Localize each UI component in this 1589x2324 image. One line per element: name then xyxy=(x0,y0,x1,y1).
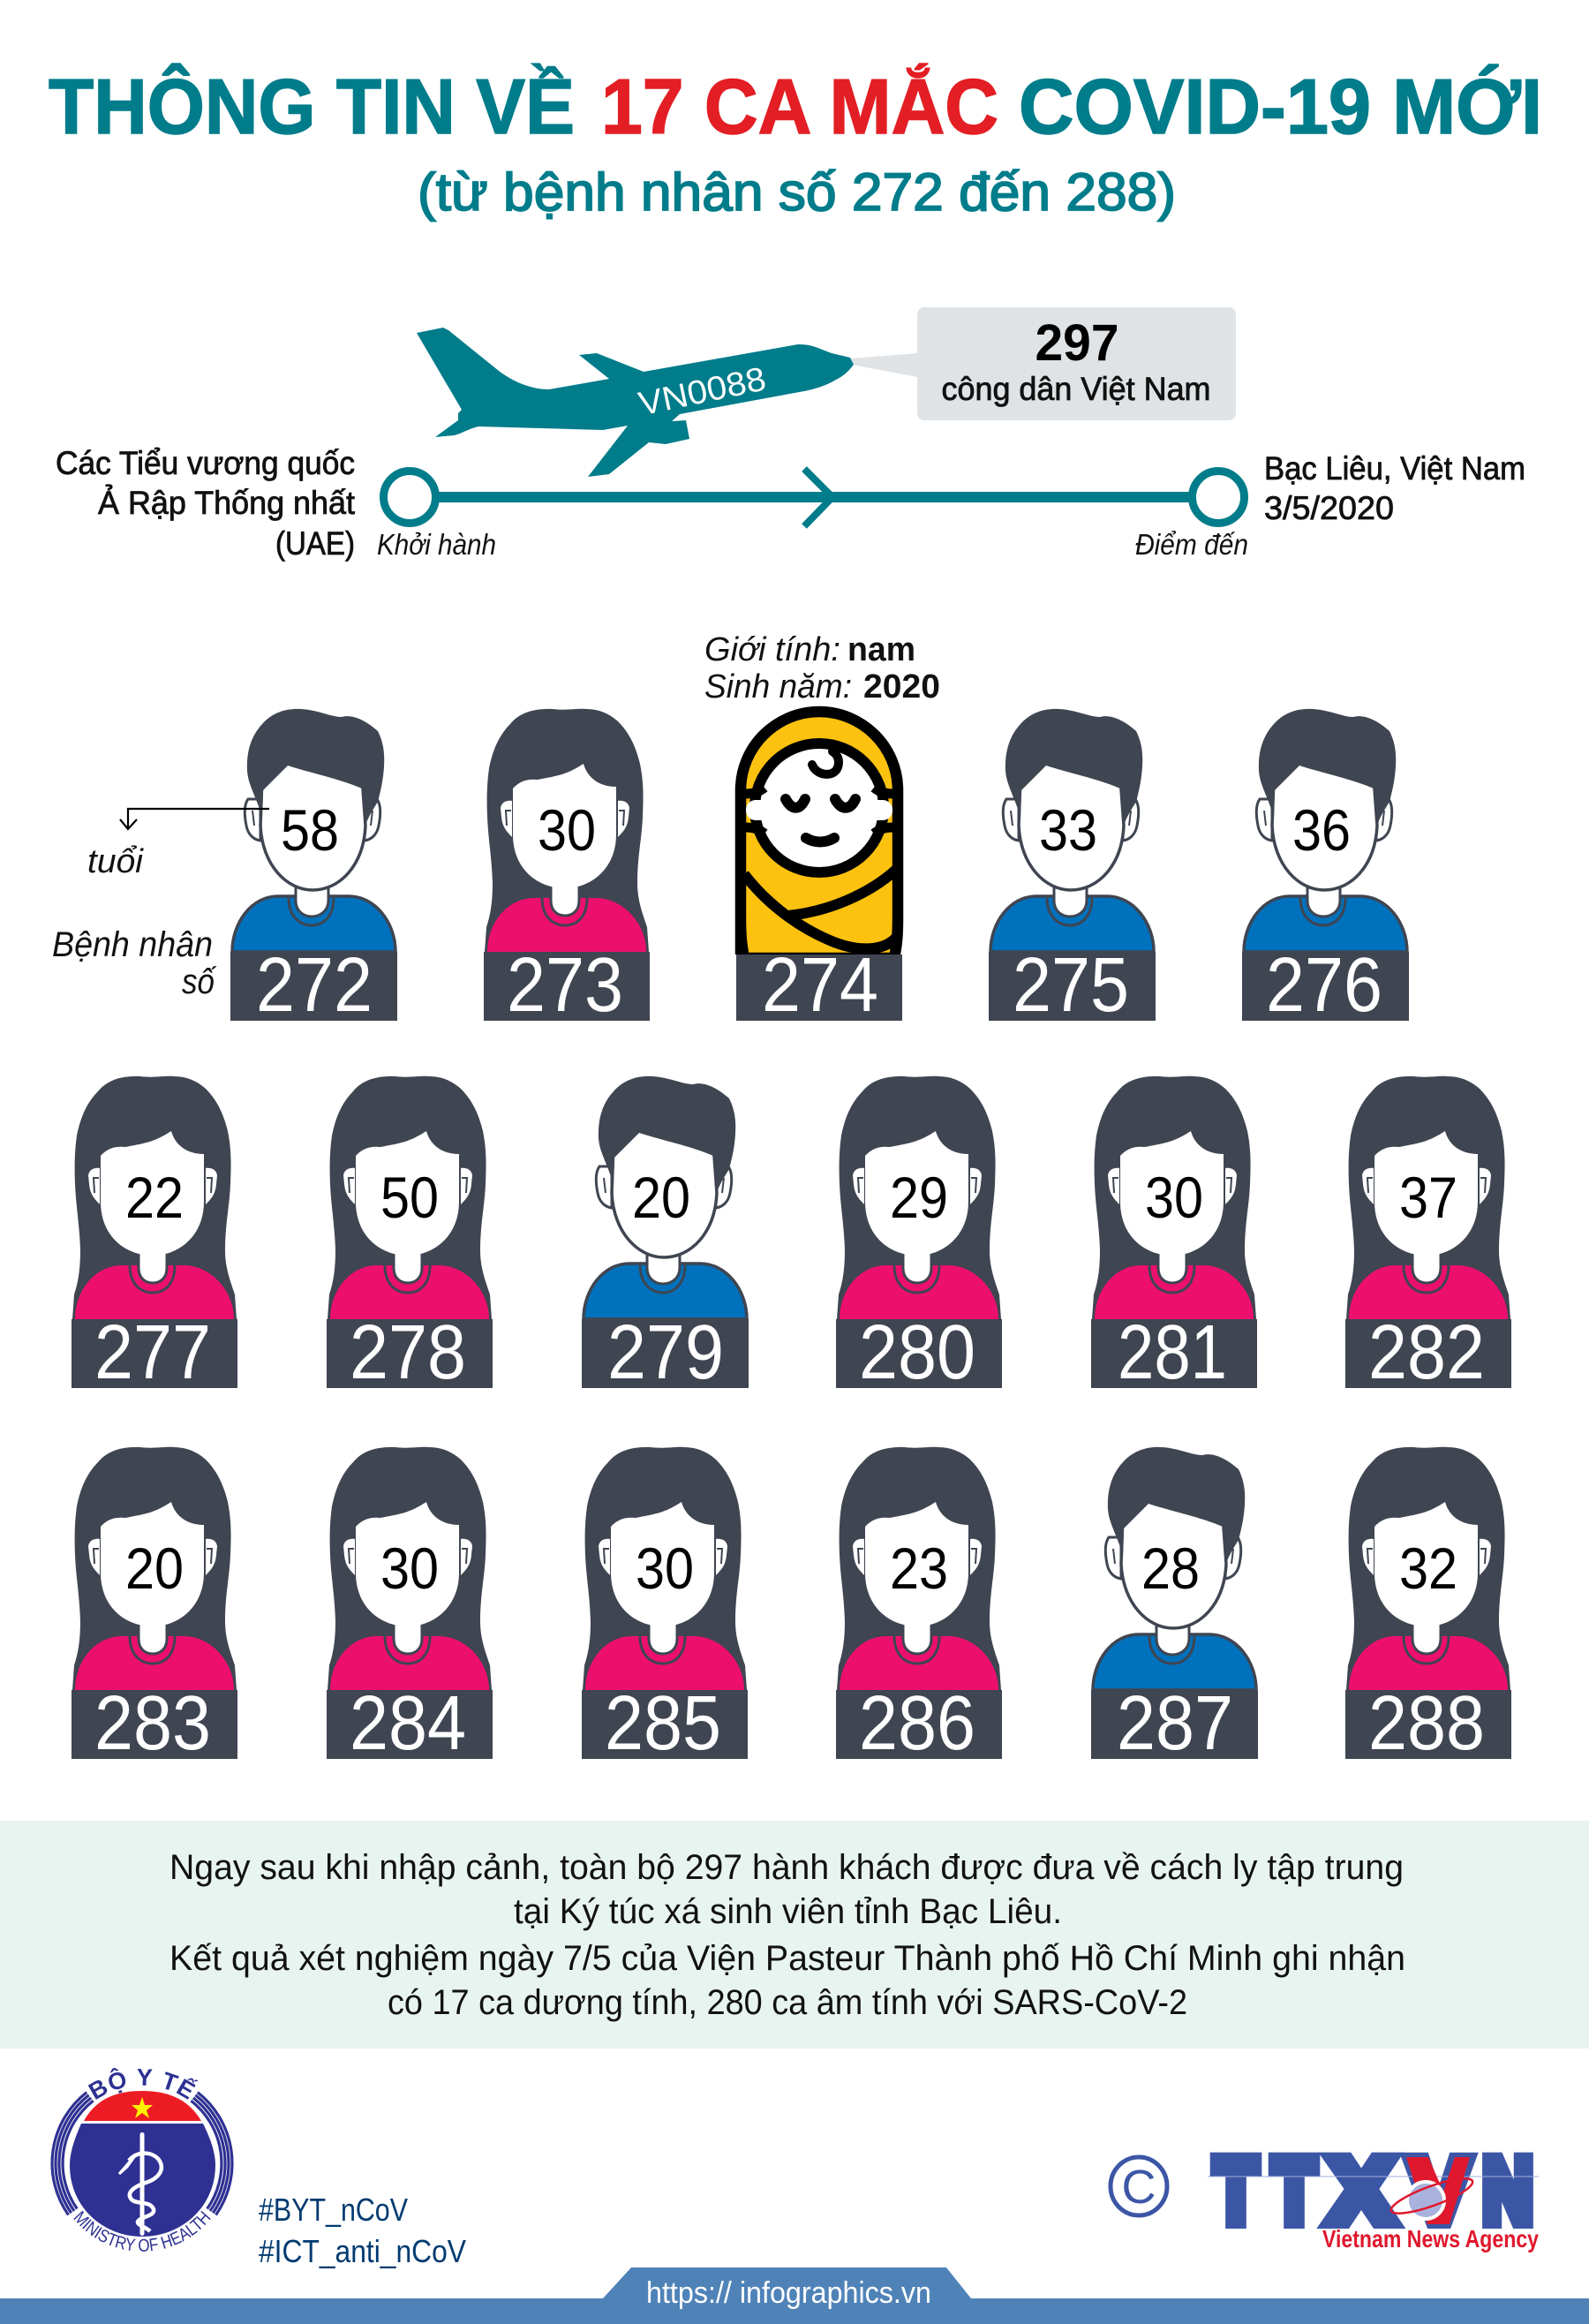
icon: airplane VN0088 xyxy=(417,328,854,477)
origin label: Các Tiểu vương quốc xyxy=(56,445,355,481)
patient 273: 30 xyxy=(538,797,596,863)
patient 287: 28 xyxy=(1141,1536,1200,1601)
arrival caption: Điểm đến xyxy=(1135,528,1248,561)
patient 287: 287 xyxy=(1117,1680,1233,1766)
patient 277: 277 xyxy=(94,1309,211,1395)
hashtags: #BYT_nCoV xyxy=(259,2192,408,2228)
footer url: https:// infographics.vn xyxy=(646,2276,931,2310)
subtitle: (từ bệnh nhân số 272 đến 288) xyxy=(418,162,1176,222)
origin label: Ả Rập Thống nhất xyxy=(98,485,356,521)
callout: 297 citizens xyxy=(829,307,1236,420)
patient 275: 275 xyxy=(1013,942,1129,1028)
patient 283 xyxy=(72,1447,237,1766)
patient 277: 22 xyxy=(125,1165,184,1230)
patient 274 baby note: nam xyxy=(847,631,915,668)
patient 282: 282 xyxy=(1368,1309,1485,1395)
destination label: 3/5/2020 xyxy=(1264,490,1394,526)
footer bar xyxy=(0,2267,1589,2324)
title xyxy=(49,63,1542,150)
logo: Ministry of Health xyxy=(50,2068,234,2252)
title: 17 CA MẮC xyxy=(601,63,998,150)
hashtags: #ICT_anti_nCoV xyxy=(259,2233,466,2269)
patient 283: 283 xyxy=(94,1680,211,1766)
copyright mark: C xyxy=(1121,2161,1156,2214)
origin label xyxy=(56,445,356,562)
patient 274 baby note: Sinh năm: xyxy=(704,668,852,706)
annotation: age xyxy=(87,809,269,880)
patient 279: 20 xyxy=(632,1165,690,1230)
logo: TTXVN Vietnam News Agency: X xyxy=(1329,2140,1393,2241)
patient 286: 23 xyxy=(890,1536,948,1601)
logo: TTXVN Vietnam News Agency xyxy=(1208,2140,1539,2252)
logo: Ministry of Health: MINISTRY OF HEALTH xyxy=(73,2211,211,2252)
patient 288: 288 xyxy=(1368,1680,1485,1766)
patient 285 xyxy=(582,1447,748,1766)
logo: TTXVN Vietnam News Agency: T xyxy=(1215,2140,1257,2241)
patient 278 xyxy=(327,1076,493,1395)
patient 274 baby note xyxy=(704,631,940,706)
patient 272: 272 xyxy=(256,942,373,1028)
panel: quarantine summary: có 17 ca dương tính, 280 ca âm tính với SARS-CoV-2 xyxy=(388,1983,1187,2022)
title: THÔNG TIN VỀ xyxy=(49,63,575,150)
patient 281: 281 xyxy=(1118,1309,1227,1395)
patient 278: 278 xyxy=(350,1309,466,1395)
patient 280 xyxy=(836,1076,1002,1395)
panel: quarantine summary: Ngay sau khi nhập cảnh, toàn bộ 297 hành khách được đưa về cách ly tập trung xyxy=(169,1848,1404,1887)
patient 281: 30 xyxy=(1145,1165,1203,1230)
patient 284: 30 xyxy=(380,1536,439,1601)
logo: TTXVN Vietnam News Agency: Vietnam News Agency xyxy=(1322,2225,1539,2252)
callout: 297 citizens: công dân Việt Nam xyxy=(941,371,1211,407)
title: COVID-19 MỚI xyxy=(1019,63,1542,150)
copyright mark xyxy=(1111,2157,1167,2215)
annotation: age: tuổi xyxy=(87,843,145,880)
panel: quarantine summary: tại Ký túc xá sinh viên tỉnh Bạc Liêu. xyxy=(514,1892,1062,1931)
annotation: patient number: Bệnh nhân xyxy=(52,925,213,964)
panel: quarantine summary: Kết quả xét nghiệm ngày 7/5 của Viện Pasteur Thành phố Hồ Chí Minh ghi nhận xyxy=(169,1939,1405,1978)
patient 272 xyxy=(230,709,397,1028)
hashtags xyxy=(259,2192,466,2269)
departure caption: Khởi hành xyxy=(377,528,496,561)
patient 280: 29 xyxy=(890,1165,948,1230)
logo: TTXVN Vietnam News Agency: V xyxy=(1409,2140,1469,2241)
patient 288: 32 xyxy=(1399,1536,1457,1601)
logo: TTXVN Vietnam News Agency: T xyxy=(1273,2140,1315,2241)
patient 279: 279 xyxy=(607,1309,724,1395)
patient 273: 273 xyxy=(507,942,623,1028)
patient 276: 36 xyxy=(1292,797,1351,863)
logo: TTXVN Vietnam News Agency: N xyxy=(1483,2140,1533,2241)
patient 285: 30 xyxy=(636,1536,694,1601)
patient 286: 286 xyxy=(859,1680,975,1766)
patient 276 xyxy=(1242,709,1409,1028)
patient 274 baby xyxy=(736,712,902,1028)
icon: airplane VN0088: VN0088 xyxy=(636,360,769,423)
patient 282: 37 xyxy=(1399,1165,1457,1230)
patient 284: 284 xyxy=(350,1680,466,1766)
patient 279 xyxy=(582,1076,749,1395)
patient 273 xyxy=(484,709,650,1028)
patient 286 xyxy=(836,1447,1002,1766)
patient 282 xyxy=(1345,1076,1511,1395)
origin label: (UAE) xyxy=(275,525,355,562)
patient 284 xyxy=(327,1447,493,1766)
patient 275 xyxy=(989,709,1156,1028)
logo: Ministry of Health: BỘ Y TẾ xyxy=(88,2068,198,2100)
route line with departure and arrival markers xyxy=(383,469,1245,526)
patient 272: 58 xyxy=(281,797,339,863)
patient 288 xyxy=(1345,1447,1511,1766)
annotation: patient number: số xyxy=(182,962,217,1001)
destination label: Bạc Liêu, Việt Nam xyxy=(1264,450,1525,487)
patient 276: 276 xyxy=(1266,942,1382,1028)
patient 275: 33 xyxy=(1039,797,1097,863)
annotation: patient number xyxy=(52,925,217,1001)
panel: quarantine summary xyxy=(0,1821,1589,2049)
destination label xyxy=(1264,450,1525,526)
patient 278: 50 xyxy=(380,1165,439,1230)
patient 274 baby: 274 xyxy=(762,942,878,1028)
callout: 297 citizens: 297 xyxy=(1035,314,1119,372)
patient 280: 280 xyxy=(859,1309,975,1395)
patient 281 xyxy=(1091,1076,1257,1395)
patient 285: 285 xyxy=(605,1680,721,1766)
patient 274 baby note: 2020 xyxy=(863,668,940,706)
patient 283: 20 xyxy=(125,1536,184,1601)
patient 274 baby note: Giới tính: xyxy=(704,631,840,668)
patient 277 xyxy=(72,1076,237,1395)
patient 287 xyxy=(1091,1447,1258,1766)
